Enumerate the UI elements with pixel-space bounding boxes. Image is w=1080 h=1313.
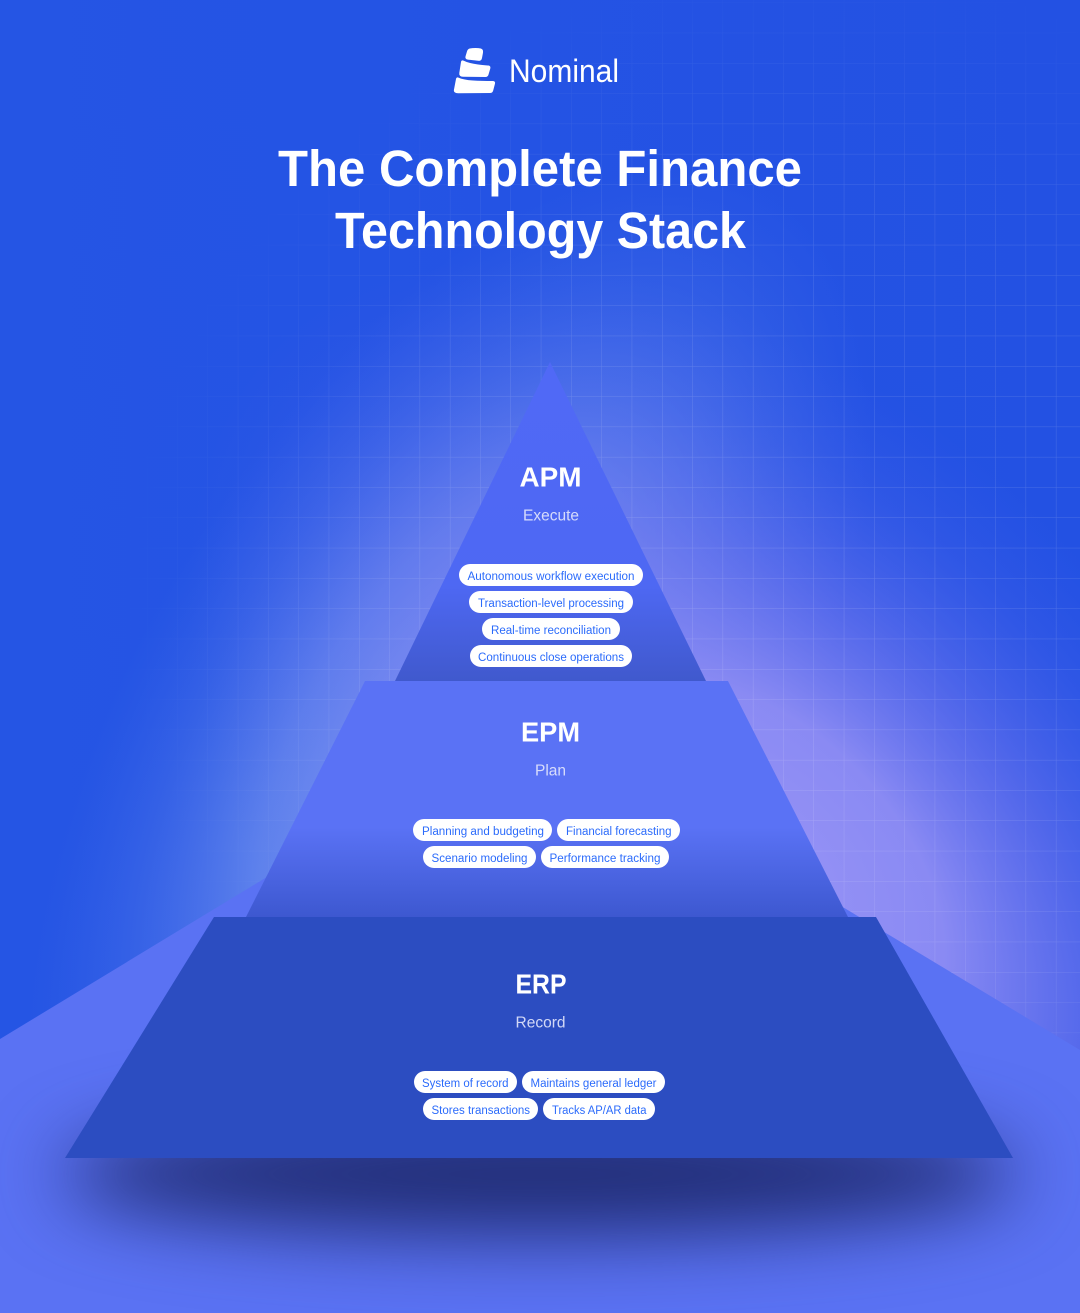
- EPM heading: EPM: [521, 716, 580, 748]
- title: The Complete Finance: [278, 140, 802, 197]
- floor shadow: [62, 1112, 1018, 1236]
- EPM subheading: Plan: [535, 762, 566, 780]
- ERP pills: Tracks AP/AR data: [552, 1105, 647, 1117]
- ERP pills: System of record: [422, 1078, 508, 1090]
- EPM pills: Financial forecasting: [566, 826, 672, 838]
- APM shape: [395, 362, 706, 681]
- background: [84, 22, 1080, 1050]
- pyramid tier: ERP: [65, 917, 1013, 1158]
- APM pills: Transaction-level processing: [478, 598, 624, 610]
- EPM pills: [413, 819, 680, 868]
- ERP pills: Stores transactions: [432, 1105, 530, 1117]
- title block: [278, 49, 802, 259]
- EPM pills: Performance tracking: [550, 853, 660, 865]
- APM pills: Autonomous workflow execution: [468, 571, 634, 583]
- APM subheading: Execute: [523, 508, 579, 524]
- EPM shape: [246, 681, 848, 917]
- ERP pills: [414, 1071, 665, 1120]
- logo wordmark: Nominal: [509, 53, 619, 89]
- APM pills: [459, 564, 643, 667]
- ERP pills: Maintains general ledger: [530, 1078, 657, 1090]
- title: [278, 140, 802, 259]
- pyramid tier: EPM: [246, 681, 848, 917]
- ERP shape: [65, 917, 1013, 1158]
- floor plane: [0, 718, 1080, 1313]
- EPM pills: Scenario modeling: [432, 853, 528, 865]
- EPM pills: Planning and budgeting: [422, 826, 544, 838]
- APM heading: APM: [520, 462, 582, 492]
- title: Technology Stack: [335, 202, 747, 259]
- logo mark: [455, 49, 494, 92]
- APM pills: Real-time reconciliation: [491, 625, 611, 637]
- ERP subheading: Record: [516, 1014, 565, 1032]
- pyramid tier: APM: [395, 362, 706, 681]
- logo: [455, 49, 619, 92]
- APM pills: Continuous close operations: [478, 652, 624, 664]
- ERP heading: ERP: [516, 968, 566, 1000]
